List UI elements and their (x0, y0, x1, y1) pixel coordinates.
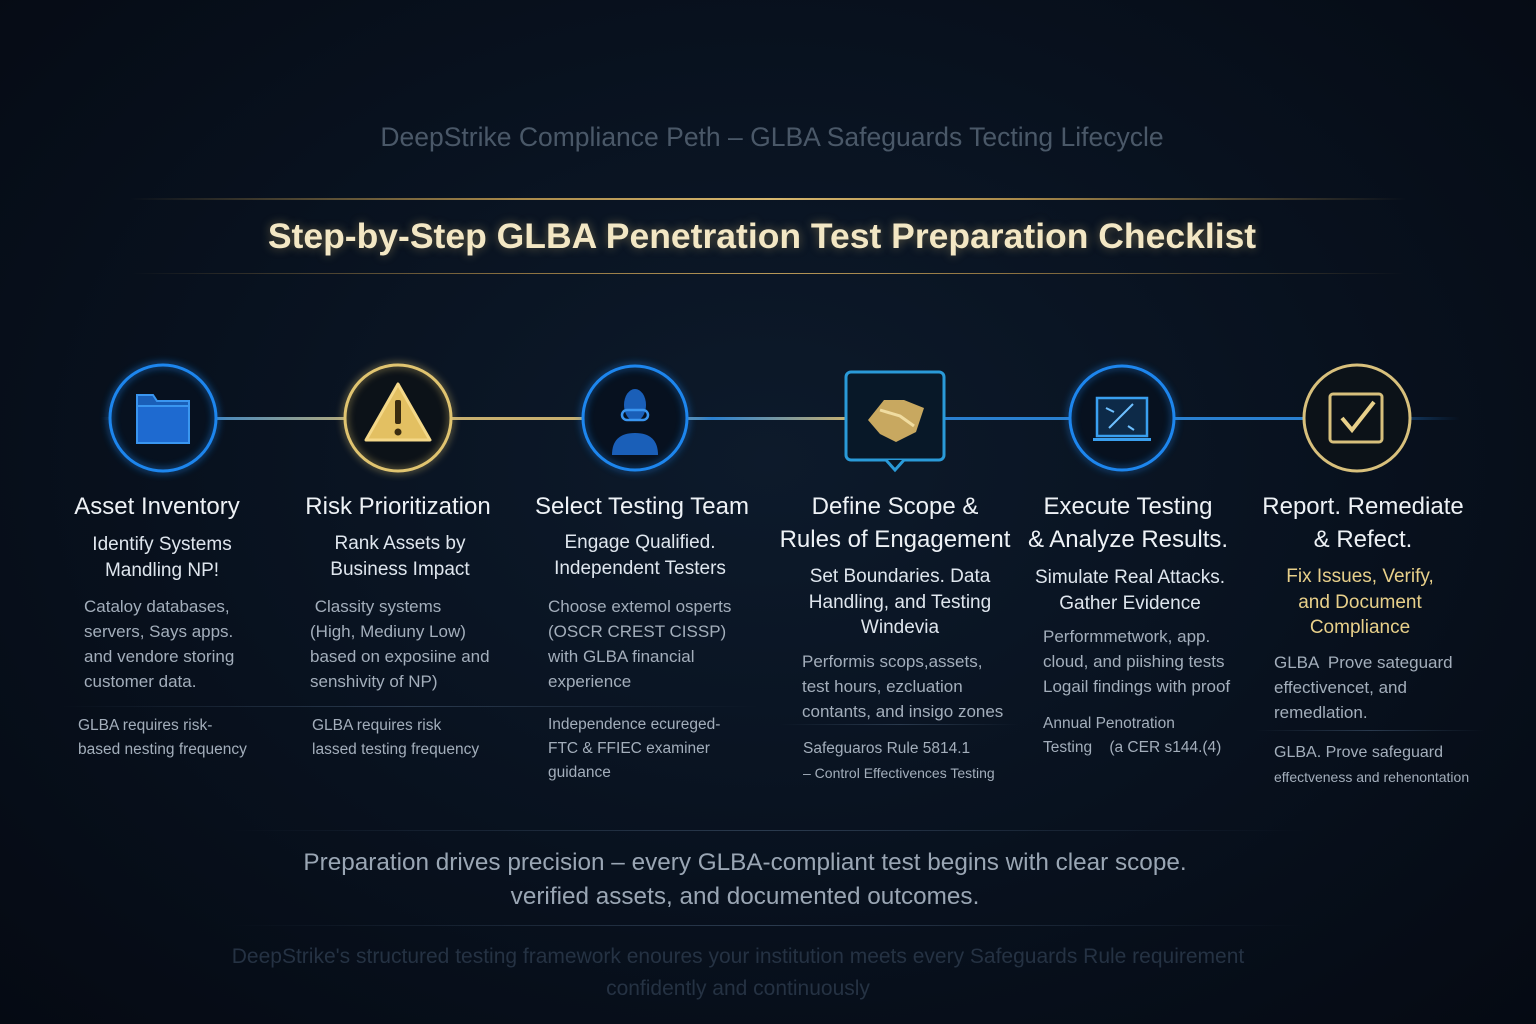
column 1: asset inventory (74, 493, 247, 758)
column 4: define scope: Set Boundaries. Data (810, 566, 990, 587)
column 3: select testing team: Select Testing Team (535, 493, 749, 520)
column 2: risk prioritization: Classity systems (315, 597, 441, 616)
column 5: execute testing: Testing (a CER s144.(4) (1043, 739, 1221, 756)
column 3: select testing team: Choose extemol osperts (548, 597, 731, 616)
column 5: execute testing (1028, 493, 1230, 756)
icon: warning (345, 365, 451, 471)
column 6: report remediate (1262, 493, 1469, 785)
icon: handshake (846, 372, 944, 470)
column 1: asset inventory: Identify Systems (92, 534, 232, 555)
column 2: risk prioritization: lassed testing frequency (312, 741, 479, 758)
column 3: select testing team: guidance (548, 764, 611, 781)
column 3: select testing team: Engage Qualified. (564, 532, 716, 553)
column 6: report remediate: effectveness and rehenontation (1274, 769, 1469, 785)
column 4: define scope: Handling, and Testing (809, 592, 991, 612)
column 5: execute testing: Performmetwork, app. (1043, 627, 1210, 646)
column 2: risk prioritization: Risk Prioritization (305, 493, 491, 520)
column 3: select testing team: Independent Testers (554, 558, 726, 578)
main title: Step-by-Step GLBA Penetration Test Preparation Checklist (268, 216, 1256, 256)
column 6: report remediate: GLBA. Prove safeguard (1274, 744, 1443, 761)
column 4: define scope: test hours, ezcluation (802, 677, 963, 696)
column 4: define scope: Performis scops,assets, (802, 652, 982, 671)
column 5: execute testing: Annual Penotration (1043, 715, 1175, 732)
column 5: execute testing: Logail findings with proof (1043, 677, 1230, 696)
column 5: execute testing: cloud, and piishing tests (1043, 652, 1224, 671)
icon: folder (110, 365, 216, 471)
column 2: risk prioritization: Business Impact (330, 558, 470, 580)
column 5: execute testing: Gather Evidence (1059, 592, 1201, 614)
top subtitle: DeepStrike Compliance Peth – GLBA Safeguards Tecting Lifecycle (380, 122, 1164, 152)
column 6: report remediate: remedlation. (1274, 703, 1368, 722)
column 2: risk prioritization: Rank Assets by (335, 533, 465, 554)
column 1: asset inventory: GLBA requires risk- (78, 717, 212, 734)
column 4: define scope: Safeguaros Rule 5814.1 (803, 740, 970, 757)
footer note: confidently and continuously (606, 977, 870, 1000)
column 5: execute testing: & Analyze Results. (1028, 526, 1228, 553)
column 1: asset inventory: Asset Inventory (74, 493, 240, 520)
column 1: asset inventory: based nesting frequency (78, 741, 247, 758)
column 2: risk prioritization: based on exposiine and (310, 647, 490, 666)
column 1: asset inventory: Mandling NP! (105, 560, 219, 580)
column 1: asset inventory: servers, Says apps. (84, 622, 233, 641)
closing statement: verified assets, and documented outcomes. (511, 883, 979, 910)
column 3: select testing team: experience (548, 672, 631, 691)
column 2: risk prioritization: (High, Mediuny Low) (310, 622, 466, 641)
column 3: select testing team: (OSCR CREST CISSP) (548, 622, 726, 641)
column 2: risk prioritization: GLBA requires risk (312, 717, 441, 734)
column 1: asset inventory: and vendore storing (84, 647, 234, 666)
column 3: select testing team: Independence ecureged- (548, 716, 720, 733)
column 6: report remediate: Report. Remediate (1262, 493, 1464, 520)
column 1: asset inventory: Cataloy databases, (84, 597, 230, 616)
column 1: asset inventory: customer data. (84, 672, 196, 691)
timeline with icons (102, 358, 1453, 478)
column 4: define scope: – Control Effectivences Testing (803, 765, 995, 781)
column 6: report remediate: Compliance (1310, 617, 1410, 638)
column 3: select testing team: with GLBA financial (548, 647, 694, 666)
closing statement (303, 849, 1187, 910)
column 6: report remediate: Fix Issues, Verify, (1286, 566, 1434, 587)
footer note: DeepStrike's structured testing framework enoures your institution meets every Safeguards Rule requirement (232, 945, 1244, 968)
column 4: define scope: Rules of Engagement (780, 526, 1010, 553)
closing statement: Preparation drives precision – every GLBA-compliant test begins with clear scope. (303, 849, 1187, 876)
footer note (232, 945, 1244, 1000)
column 6: report remediate: & Refect. (1314, 526, 1412, 553)
column 5: execute testing: Execute Testing (1043, 493, 1212, 520)
column 2: risk prioritization: senshivity of NP) (310, 672, 438, 691)
column 4: define scope: Define Scope & (812, 493, 978, 520)
column 4: define scope (780, 493, 1010, 781)
column 3: select testing team: FTC & FFIEC examiner (548, 740, 710, 757)
column 4: define scope: contants, and insigo zones (802, 702, 1003, 721)
column 5: execute testing: Simulate Real Attacks. (1035, 567, 1225, 588)
icon: tester (583, 366, 687, 470)
column 6: report remediate: and Document (1298, 592, 1422, 612)
icon: checkbox (1304, 365, 1410, 471)
column 3: select testing team (535, 493, 749, 781)
column 4: define scope: Windevia (861, 617, 939, 638)
icon: screen (1070, 366, 1174, 470)
column 6: report remediate: effectivencet, and (1274, 678, 1407, 697)
column 2: risk prioritization (305, 493, 491, 758)
column 6: report remediate: GLBA Prove sateguard (1274, 653, 1453, 672)
